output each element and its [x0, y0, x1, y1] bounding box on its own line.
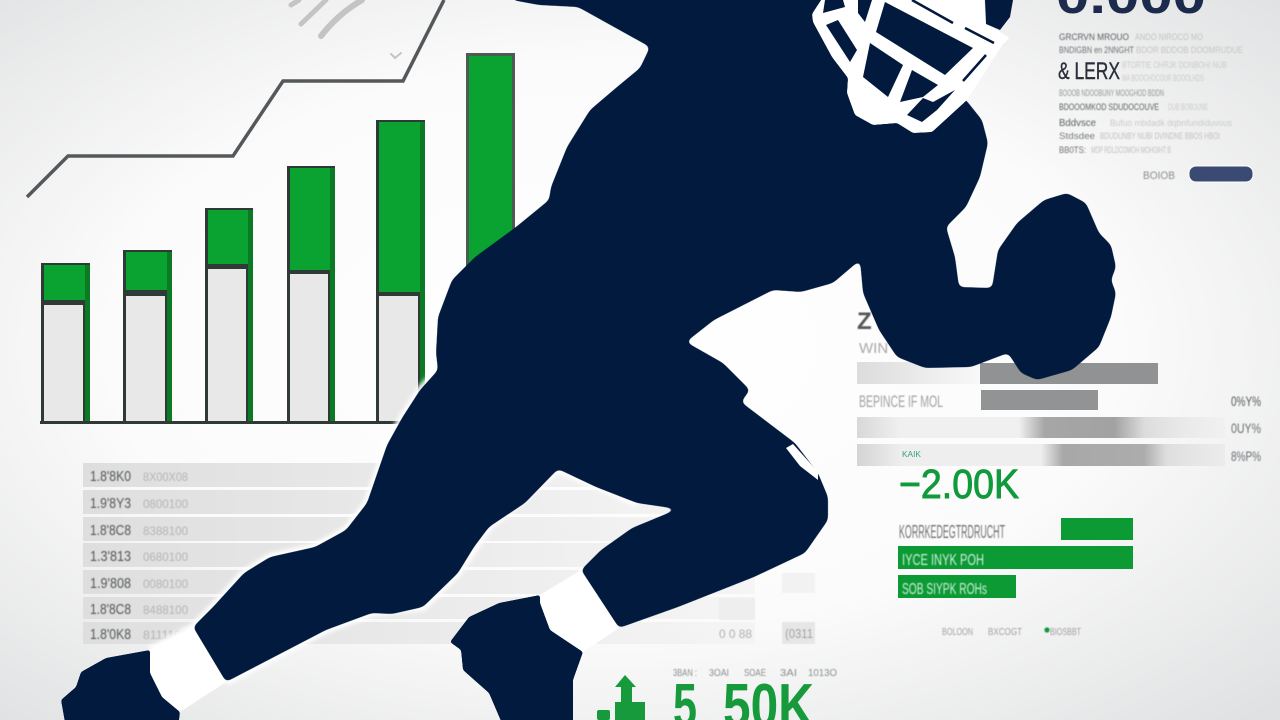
pill button — [1189, 166, 1253, 182]
knee highlight — [786, 444, 818, 480]
small labels: 3OAI — [709, 668, 729, 679]
bar row 3: 0UY% — [1231, 420, 1261, 436]
icon: arrow and bars — [597, 675, 645, 720]
rear sock — [150, 627, 226, 712]
row 3: 8388100 — [143, 524, 188, 538]
bottom stat — [597, 668, 837, 720]
bar row 4: KAIK — [902, 450, 922, 459]
legend: BIOSBBT — [1050, 627, 1081, 638]
brush smudges top — [291, 0, 401, 58]
row 4: 1.3'813 — [90, 548, 131, 565]
legend: BXCOGT — [988, 627, 1022, 638]
trend line — [27, 0, 444, 197]
row 7 — [83, 622, 755, 644]
text lines: DUB BOBOUNE — [1168, 102, 1208, 112]
green bar 3 — [898, 575, 1016, 598]
face mask window lower left — [863, 43, 903, 97]
row 2: 1.9'8Y3 — [90, 495, 131, 512]
bar row 2: 0%Y% — [1231, 393, 1261, 409]
bar 6 — [466, 53, 515, 294]
small labels: 3BAN : — [673, 668, 697, 679]
legend — [942, 627, 1081, 638]
small labels: 1013O — [808, 668, 837, 679]
bar 5 — [376, 120, 425, 422]
face mask window upper left — [823, 0, 845, 13]
row 2 — [83, 490, 755, 514]
text lines: BDOR BDDOB DOOMRUDUE — [1136, 45, 1243, 55]
face mask window center — [876, 2, 973, 75]
text lines: Bddvsce — [1059, 118, 1096, 129]
value — [673, 672, 814, 720]
bar row 4 — [857, 444, 1261, 466]
player edge glow — [150, 370, 637, 682]
table right column — [719, 573, 815, 644]
text lines: Bufuo mbdadk dqbnfundiduvous — [1110, 118, 1232, 128]
green bar 2: IYCE INYK POH — [902, 552, 984, 569]
text lines: BB0TS: — [1059, 145, 1086, 155]
helmet shell — [812, 0, 1010, 133]
text lines: BTORTIE OHRJK DONBOHI NUB — [1122, 60, 1227, 70]
text lines: BDUDUNBY NUBI DVINDNE BBOS HBOI — [1100, 131, 1220, 141]
text lines: BNDIGBN en 2NNGHT — [1059, 45, 1134, 55]
row 6 — [83, 597, 755, 619]
small labels: 3AI — [780, 668, 797, 679]
green bar 3: SOB SIYPK ROHs — [902, 581, 987, 598]
bar row 2 — [859, 390, 1261, 411]
row 3: 1.8'8C8 — [90, 522, 131, 539]
right bars panel — [857, 308, 1261, 466]
table right column: 0 0 88 — [719, 627, 752, 641]
top right stats panel — [1056, 0, 1253, 182]
bar row 1 — [857, 362, 1158, 384]
sub-heading: & LERX — [1058, 58, 1120, 85]
value: −2.00K — [899, 461, 1019, 507]
text lines: BDOOOMKOD SDUDOCOUVE — [1059, 102, 1159, 112]
helmet crown — [985, 0, 1013, 30]
front cleat — [450, 595, 583, 720]
row 5: 0080100 — [143, 577, 188, 591]
right bars panel: WIN — [859, 340, 888, 357]
front sock — [540, 570, 619, 652]
green bar 1: KORRKEDEGTRDRUCHT — [899, 522, 1005, 542]
mask detail lines — [912, 0, 994, 81]
bar row 3 — [857, 417, 1261, 438]
text lines: MDP RDLDCOMOH MOHOIHT B — [1091, 145, 1171, 155]
football helmet — [812, 0, 1013, 133]
rear cleat — [61, 650, 180, 720]
button label: BOIOB — [1143, 170, 1175, 182]
text lines: MA BOOCHOCOUR BOOOLHDS — [1122, 73, 1204, 83]
stats table — [83, 463, 815, 644]
chart baseline — [40, 421, 426, 424]
bar chart — [40, 53, 515, 424]
row 5 — [83, 570, 755, 594]
text lines: BOOOB NDOOBUNY MOOGHOD BDDN — [1059, 88, 1164, 98]
text lines — [1059, 32, 1243, 155]
row 4 — [83, 543, 755, 567]
row 1 — [83, 463, 755, 487]
green stat panel — [898, 461, 1133, 638]
bar row 2: BEPINCE IF MOL — [859, 392, 943, 411]
row 6: 1.8'8C8 — [90, 601, 131, 618]
text lines: ANDO NIROCO MO — [1135, 32, 1203, 42]
bar 2 — [123, 250, 172, 422]
row 6: 8488100 — [143, 603, 188, 617]
chin window — [907, 90, 955, 122]
bar 3 — [205, 208, 253, 422]
panel fragments: Z — [857, 308, 872, 335]
face mask window lower right — [900, 70, 938, 102]
bar row 4: 8%P% — [1231, 448, 1261, 464]
text lines: GRCRVN MROUO — [1059, 32, 1129, 42]
table right column: (0311 — [785, 626, 813, 641]
face mask window upper — [858, 0, 872, 22]
row 7: 8111100 — [143, 628, 188, 642]
row 4: 0680100 — [143, 550, 188, 564]
face mask window side — [826, 20, 857, 62]
row 3 — [83, 517, 755, 541]
small labels — [673, 668, 837, 679]
green bar 2 — [898, 546, 1133, 569]
row 5: 1.9'808 — [90, 575, 131, 592]
legend: BOLOON — [942, 627, 973, 638]
row 1: 8X00X08 — [143, 470, 188, 484]
small labels: SOAE — [744, 668, 766, 679]
player body — [193, 0, 1116, 682]
row 2: 0800100 — [143, 497, 188, 511]
text lines: Stdsdee — [1059, 131, 1095, 141]
bar 4 — [287, 166, 335, 422]
row 7: 1.8'0K8 — [90, 626, 131, 643]
row 1: 1.8'8K0 — [90, 468, 131, 485]
bar 1 — [41, 263, 90, 422]
